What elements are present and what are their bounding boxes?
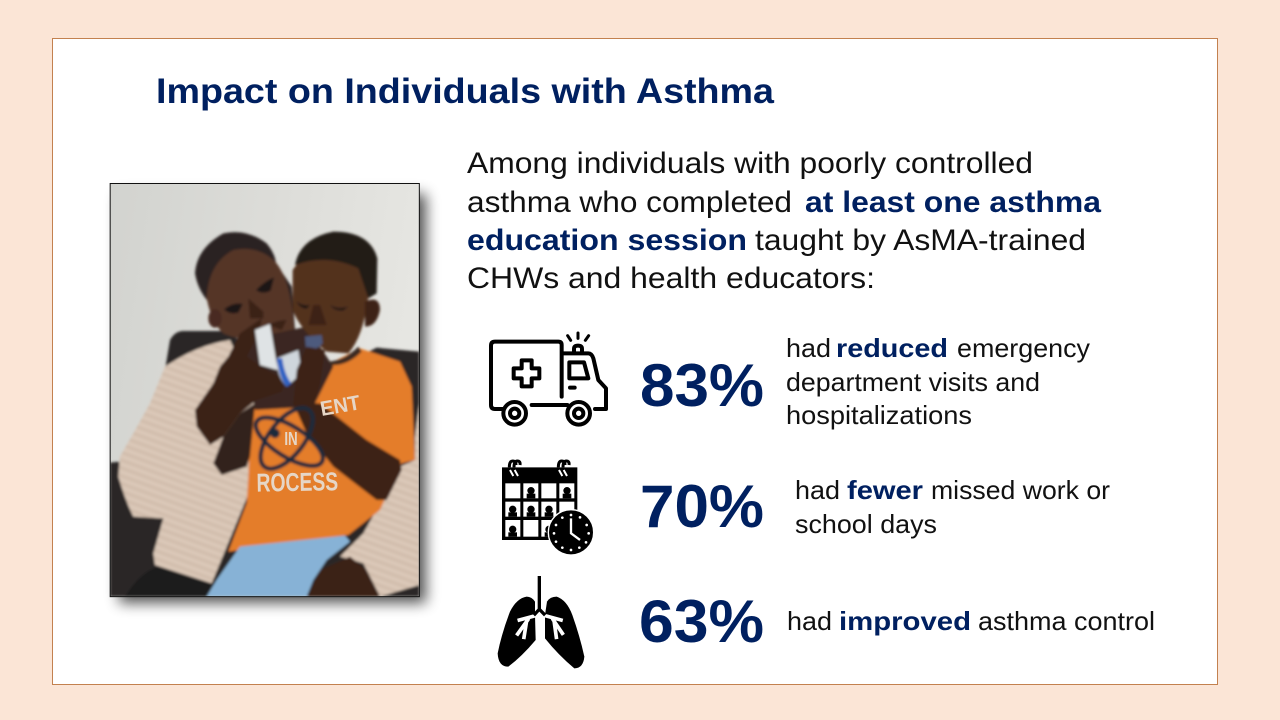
stat text: improved control: had <box>787 606 832 636</box>
stat text: reduced visits: had <box>786 333 831 363</box>
woman's face <box>207 249 294 343</box>
intro paragraph: education session <box>467 224 747 257</box>
stat text: improved control <box>787 606 1155 636</box>
sweater body <box>118 340 257 583</box>
intro paragraph <box>467 147 1101 295</box>
stat: 63%: 63% <box>639 588 764 655</box>
intro paragraph: asthma who completed <box>467 186 792 219</box>
woman's hand <box>195 318 285 445</box>
stat text: fewer missed days: fewer <box>847 475 923 505</box>
child's shirt <box>228 348 415 552</box>
intro paragraph: at least one asthma <box>805 186 1101 219</box>
child's right arm <box>293 403 402 500</box>
stat text: reduced visits: emergency <box>957 333 1090 363</box>
inhaler <box>255 324 278 370</box>
photo: woman helping child use an inhaler <box>110 183 426 603</box>
child's leg <box>307 557 380 597</box>
icon: ambulance <box>491 333 606 425</box>
stat text: fewer missed days: missed work or <box>931 475 1110 505</box>
stat text: reduced visits: department visits and <box>786 367 1040 397</box>
stat text: reduced visits: hospitalizations <box>786 400 972 430</box>
stat text: improved control: improved <box>839 606 971 636</box>
shirt lettering <box>258 395 359 492</box>
dark trousers <box>125 567 212 597</box>
shirt lettering: ROCESS <box>256 466 338 498</box>
stat text: improved control: asthma control <box>978 606 1155 636</box>
shirt collar <box>327 347 362 365</box>
shirt lettering: IN <box>284 428 298 449</box>
stat: 83%: 83% <box>640 352 764 419</box>
icon: lungs <box>498 576 584 668</box>
dark area between faces and hands <box>243 327 333 410</box>
child's left arm <box>213 403 255 475</box>
shirt print: atom <box>251 404 328 472</box>
stat text: reduced visits <box>786 333 1090 430</box>
child's hand <box>293 347 325 407</box>
stat: 70%: 70% <box>640 473 764 540</box>
stat text: fewer missed days <box>795 475 1110 539</box>
stat text: reduced visits: reduced <box>836 333 948 363</box>
stat text: fewer missed days: school days <box>795 509 937 539</box>
shirt lettering: ENT <box>319 391 362 421</box>
child's head <box>293 250 368 353</box>
icon: calendar with clock <box>502 461 594 555</box>
stat text: fewer missed days: had <box>795 475 840 505</box>
woman's hair <box>195 232 295 330</box>
intro paragraph: Among individuals with poorly controlled <box>467 147 1033 180</box>
sweater right sleeve <box>340 403 419 597</box>
couch <box>110 331 419 597</box>
intro paragraph: CHWs and health educators: <box>467 262 875 295</box>
intro paragraph: taught by AsMA-trained <box>755 224 1086 257</box>
title: Impact on Individuals with Asthma <box>156 72 775 111</box>
jeans <box>207 536 350 597</box>
